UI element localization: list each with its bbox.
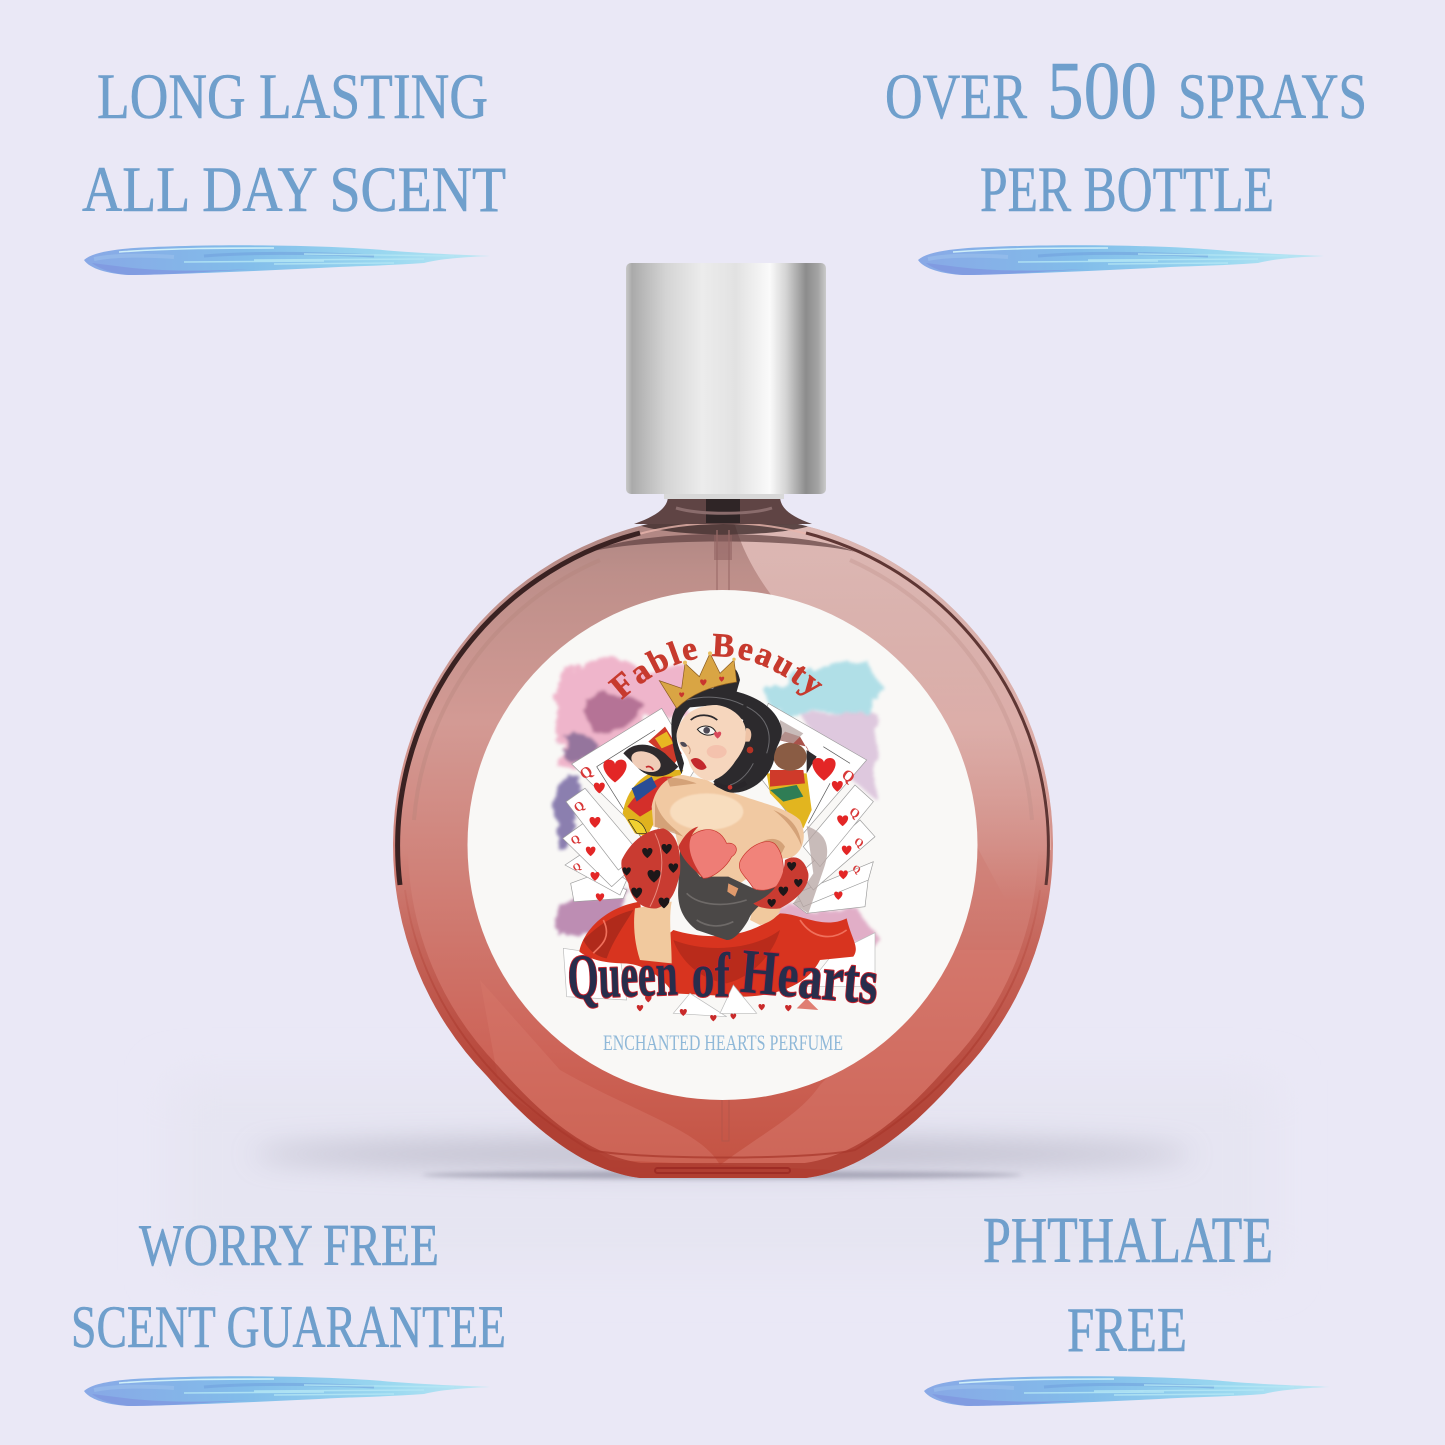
floor and bottle shadow (170, 1080, 1275, 1270)
heart bodice (678, 827, 783, 897)
queen card face left (597, 727, 683, 838)
top right light reflection (736, 524, 1053, 858)
playing cards left (563, 708, 697, 902)
playing cards right (747, 703, 875, 913)
arms (634, 902, 782, 963)
chest shading (655, 778, 802, 857)
outer lower band (396, 889, 1050, 1178)
brush stroke: top left (84, 245, 490, 275)
bottle label (468, 590, 978, 1100)
heading: long lasting all day scent: ALL DAY SCENT (82, 154, 506, 226)
rim glow right (850, 560, 1032, 820)
lower right reflection (723, 950, 1036, 1166)
cap collar (664, 494, 784, 499)
card letters: Q (571, 861, 583, 874)
base oval (655, 1168, 790, 1173)
corset shine (687, 893, 747, 926)
title: Queen of Hearts: Queen (566, 939, 679, 1012)
crown (659, 651, 737, 708)
rim glow left (412, 662, 474, 820)
heading: worry free scent guarantee (71, 1212, 506, 1360)
card letters: Q (571, 798, 587, 815)
title: Queen of Hearts: of (692, 941, 731, 1011)
heading: over 500 sprays per bottle: 500 (1047, 44, 1157, 136)
bottle body (385, 505, 1065, 1185)
brush stroke: bottom right (924, 1376, 1330, 1406)
falling cards behind (563, 933, 875, 1000)
silver cap (626, 263, 826, 494)
dark right rim (806, 533, 1048, 885)
perfume bottle (385, 263, 1065, 1185)
heading: over 500 sprays per bottle: SPRAYS (1178, 61, 1367, 133)
label tagline: ENCHANTED HEARTS PERFUME (603, 1030, 843, 1055)
chest highlight (670, 793, 743, 830)
label artwork (550, 634, 886, 1022)
heading: long lasting all day scent: LONG LASTING (97, 61, 488, 133)
brand arc: Fable Beauty (622, 656, 816, 700)
lower left reflection (492, 1044, 718, 1163)
skirt (579, 902, 856, 997)
heading: phthalate free (983, 1204, 1273, 1365)
outer pale edge (396, 523, 1050, 850)
card letters: Q (852, 836, 866, 850)
brush stroke: top right (918, 245, 1324, 275)
heading: phthalate free: PHTHALATE (983, 1204, 1273, 1277)
heading: over 500 sprays per bottle: PER BOTTLE (980, 154, 1274, 226)
hair (671, 667, 782, 793)
dark left rim (398, 533, 640, 885)
inner lower line (405, 890, 1040, 1158)
right sleeve (753, 857, 808, 909)
hair highlights (687, 697, 769, 785)
card letters (569, 762, 866, 877)
corset (678, 850, 782, 940)
facial features (680, 715, 754, 770)
spray tube (717, 530, 729, 592)
watercolour wash (555, 657, 880, 947)
card hearts (586, 758, 851, 902)
scattered hearts (637, 996, 818, 1021)
queen card face right (767, 732, 850, 828)
shards (673, 985, 757, 1017)
card letters: Q (569, 833, 583, 848)
brush stroke: bottom left (84, 1376, 490, 1406)
heading: over 500 sprays per bottle (885, 44, 1367, 226)
label artwork: Fable Beauty (608, 634, 822, 700)
bottle neck (634, 496, 812, 524)
choker (715, 783, 746, 790)
left sleeve (621, 828, 680, 908)
heading: long lasting all day scent (82, 61, 506, 226)
heading: worry free scent guarantee: SCENT GUARANTEE (71, 1294, 506, 1360)
heading: over 500 sprays per bottle: OVER (885, 61, 1028, 133)
card letters: Q (577, 762, 596, 783)
card letters: Q (850, 863, 863, 877)
shoulder shadow (590, 534, 856, 552)
title: Queen of Hearts (566, 936, 881, 1018)
grey card shadow (780, 720, 827, 913)
face (677, 705, 746, 781)
title: Queen of Hearts: Hearts (738, 936, 881, 1018)
card letters: Q (838, 766, 858, 787)
card letters: Q (847, 804, 863, 822)
heading: worry free scent guarantee: WORRY FREE (139, 1212, 439, 1278)
heading: phthalate free: FREE (1067, 1294, 1187, 1365)
shoulders and chest (652, 775, 804, 883)
